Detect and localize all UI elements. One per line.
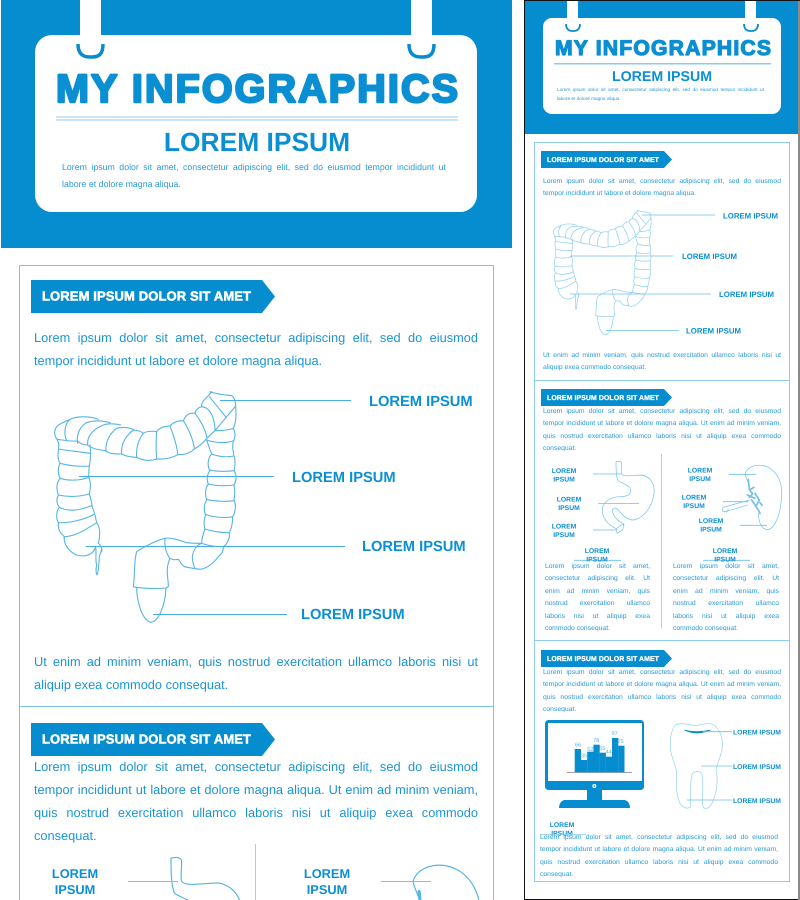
section ribbon heading: LOREM IPSUM DOLOR SIT AMET [42,288,251,304]
mini ribbon heading [541,389,672,406]
kidney label: LOREM [304,866,350,881]
illustration: stomach [602,461,654,533]
leader lines [570,215,715,330]
kidney label 1: LOREM [688,468,712,475]
closing paragraph: tempor incididunt ut labore et dolore magna aliqua. Ut enim ad minim veniam, [540,846,778,853]
kidney label 2: IPSUM [683,503,705,510]
paragraph: consequat. [543,706,576,713]
paragraph: quis nostrud exercitation ullamco laboris nisi ut aliquip exea commodo [543,433,781,440]
leader lines [128,880,431,882]
bar chart [567,731,632,773]
stomach label 2: IPSUM [558,505,580,512]
illustration: kidney [722,465,782,530]
bar chart: 55 [599,746,605,752]
header intro text: Lorem ipsum dolor sit amet, consectetur adipiscing elit, sed do eiusmod tempor incididunt ut [62,162,446,172]
bar chart: 44 [606,750,612,756]
label 4: LOREM IPSUM [686,326,741,336]
closing paragraph [540,834,778,878]
panel: stomach and kidney section [19,706,494,900]
kidney column text: Lorem ipsum dolor sit amet, [673,563,779,570]
header intro text [62,162,446,189]
closing paragraph: quis nostrud exercitation ullamco laboris nisi ut aliquip exea commodo [540,859,778,866]
label 2: LOREM IPSUM [292,470,396,486]
edge strip [798,1,800,900]
paragraph: tempor incididunt ut labore et dolore magna aliqua. Ut enim ad minim veniam, [543,420,781,427]
mini ribbon heading: LOREM IPSUM DOLOR SIT AMET [547,656,660,663]
mini rule [554,63,771,64]
paragraph: Lorem ipsum dolor sit amet, consectetur adipiscing elit, sed do eiusmod [34,759,478,774]
kidney label: IPSUM [307,882,347,897]
paragraph: Lorem ipsum dolor sit amet, consectetur adipiscing elit, sed do eiusmod [543,178,781,185]
subtitle: LOREM IPSUM [164,127,350,157]
closing paragraph: Ut enim ad minim veniam, quis nostrud exercitation ullamco laboris nisi ut [543,352,781,359]
stomach label: LOREM [52,866,98,881]
intro paragraph: Lorem ipsum dolor sit amet, consectetur adipiscing elit, sed do eiusmod [34,330,478,345]
kidney column text: consectetur adipiscing elit. Ut [673,575,779,582]
hanging sign board [35,0,477,212]
mini subtitle: LOREM IPSUM [612,69,712,85]
closing paragraph: aliquip exea commodo consequat. [543,364,646,371]
right preview column [524,0,800,900]
stomach column text: Lorem ipsum dolor sit amet, [545,563,650,570]
paragraph: quis nostrud exercitation ullamco laboris nisi ut aliquip exea commodo [34,805,478,820]
stomach column text: laboris nisi ut aliquip exea [545,613,650,620]
intro paragraph: tempor incididunt ut labore et dolore magna aliqua. [34,353,322,368]
kidney column text [673,563,780,632]
label 4: LOREM IPSUM [301,607,405,623]
leader lines [79,400,351,614]
mini sign board [543,1,781,114]
stomach label 1: IPSUM [553,476,575,484]
kidney label 4: IPSUM [714,556,736,563]
label 1: LOREM IPSUM [369,394,473,410]
illustration: kidney [371,865,481,900]
large bowel diagram with leader labels [54,391,473,623]
cropped organ diagrams [52,844,479,900]
stomach column text: nostrud exercitation ullamco [545,600,650,607]
column divider [255,844,256,900]
icon: desktop monitor [545,720,644,808]
kidney label 1: IPSUM [689,476,711,483]
mini panel: large bowel [534,142,790,381]
stomach label 2: LOREM [557,497,581,504]
title: MY INFOGRAPHICS [56,67,458,111]
kidney column text: commodo consequat. [673,625,738,632]
bar chart: 97 [612,731,618,737]
mini intro text: labore et dolore magna aliqua. [557,97,621,102]
stomach column text: enim ad minim veniam, quis [545,588,650,595]
closing paragraph: Ut enim ad minim veniam, quis nostrud exercitation ullamco laboris nisi ut [34,654,478,669]
stomach label 3: IPSUM [553,532,575,539]
paragraph: Lorem ipsum dolor sit amet, consectetur adipiscing elit, sed do eiusmod [543,408,781,415]
kidney label 2: LOREM [682,495,706,502]
kidney label 4: LOREM [713,548,737,555]
paragraph: tempor incididunt ut labore et dolore magna aliqua. Ut enim ad minim veniam, [543,681,781,688]
paragraph: consequat. [543,445,576,452]
mini ribbon heading: LOREM IPSUM DOLOR SIT AMET [547,157,660,164]
tooth label 1: LOREM IPSUM [733,730,781,736]
paragraph [543,669,781,713]
panel: large bowel section [19,265,494,707]
kidney column text: nostrud exercitation ullamco [673,600,779,607]
tooth label 2: LOREM IPSUM [733,764,781,771]
mini panel: stomach and kidney [534,380,790,641]
intro paragraph [34,330,478,368]
paragraph: tempor incididunt ut labore et dolore magna aliqua. Ut enim ad minim veniam, [34,782,478,797]
illustration: large intestine [55,392,236,622]
mini header banner [525,1,798,134]
header banner: left [1,0,512,248]
bar chart: 75 [618,739,624,745]
paragraph: tempor incididunt ut labore et dolore magna aliqua. [543,190,696,197]
stomach label: IPSUM [55,882,95,897]
closing paragraph [34,654,478,692]
closing paragraph [543,352,781,371]
section ribbon heading: LOREM IPSUM DOLOR SIT AMET [42,732,251,746]
paragraph: Lorem ipsum dolor sit amet, consectetur adipiscing elit, sed do eiusmod [543,669,781,676]
mini panel: monitor chart and tooth [534,640,790,882]
mini ribbon heading [541,650,672,667]
bar chart: 52 [587,747,593,753]
double rule [56,116,458,120]
closing paragraph: consequat. [540,871,573,878]
kidney label 3: LOREM [699,518,723,525]
closing paragraph: Lorem ipsum dolor sit amet, consectetur adipiscing elit, sed do eiusmod [540,834,778,841]
mini large bowel diagram [552,210,778,336]
stomach column text: commodo consequat. [545,625,610,632]
paragraph: quis nostrud exercitation ullamco laboris nisi ut aliquip exea commodo [543,694,781,701]
label 3: LOREM IPSUM [719,290,774,299]
closing paragraph: aliquip exea commodo consequat. [34,677,228,692]
bar chart: 66 [575,742,581,748]
mini title: MY INFOGRAPHICS [555,37,771,60]
mini intro text: Lorem ipsum dolor sit amet, consectetur adipiscing elit, sed do eiusmod tempor incididunt ut [557,88,764,92]
section ribbon heading [31,280,275,313]
stomach column text: consectetur adipiscing elit. Ut [545,575,650,582]
tooth label 3: LOREM IPSUM [733,798,781,805]
stomach column text [545,563,650,632]
stomach label 3: LOREM [552,524,576,531]
leader lines [687,732,732,800]
monitor label: IPSUM [551,830,573,837]
section ribbon heading [31,723,275,756]
header intro text: labore et dolore magna aliqua. [62,179,181,189]
mini ribbon heading: LOREM IPSUM DOLOR SIT AMET [547,395,660,402]
paragraph: consequat. [34,828,97,843]
kidney column text: enim ad minim veniam, quis [673,588,779,595]
illustration: large intestine [553,210,651,335]
bar chart: 78 [593,738,599,744]
label 1: LOREM IPSUM [723,212,778,220]
leader lines [574,474,767,560]
illustration: stomach [146,857,242,900]
label 2: LOREM IPSUM [682,252,737,261]
bar chart: 35 [581,754,587,760]
mini ribbon heading [541,151,672,168]
kidney column text: laboris nisi ut aliquip exea [673,613,779,620]
column divider [661,454,662,628]
label 3: LOREM IPSUM [362,539,466,555]
paragraph [543,178,781,197]
stomach label 4: IPSUM [586,556,608,563]
paragraph [543,408,781,452]
monitor label: LOREM [550,822,574,829]
stomach label 4: LOREM [585,548,609,555]
kidney label 3: IPSUM [700,526,722,533]
stomach label 1: LOREM [552,468,576,475]
organ diagrams [552,454,782,628]
monitor label rule [540,833,586,836]
illustration: tooth [670,724,722,808]
paragraph [34,759,478,843]
mini intro text [557,88,764,102]
monitor and tooth figures [540,720,781,837]
